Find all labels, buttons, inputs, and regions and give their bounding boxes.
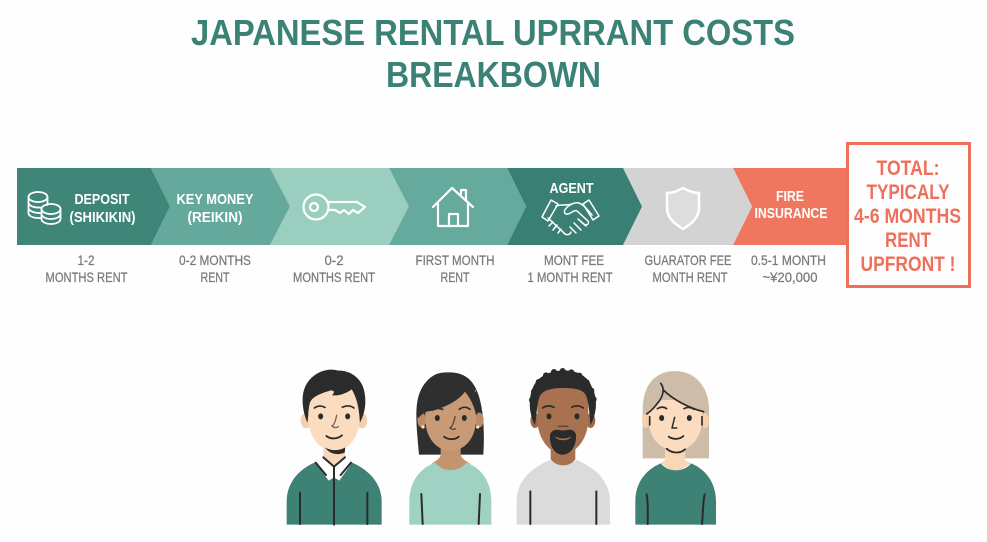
cost detail labels: 0.5-1 MONTH <box>751 252 826 268</box>
step: key money: KEY MONEY <box>176 191 254 208</box>
callout: total upfront: TOTAL: <box>876 157 940 180</box>
cost detail labels: MONTHS RENT <box>293 269 375 285</box>
icon: house <box>433 188 473 226</box>
title: BREAKBOWN <box>386 54 601 95</box>
cost detail labels: 1 MONTH RENT <box>528 269 613 285</box>
icon: shield <box>667 188 699 229</box>
icon: coins <box>28 192 60 224</box>
cost detail labels: RENT <box>440 269 470 285</box>
cost detail labels: 0-2 MONTHS <box>179 252 251 268</box>
title: JAPANESE RENTAL UPRRANT COSTS <box>191 12 795 53</box>
step: deposit: (SHIKIKIN) <box>70 209 136 226</box>
step: deposit: DEPOSIT <box>74 191 130 208</box>
step: deposit <box>17 168 170 245</box>
icon: handshake <box>542 200 599 235</box>
cost detail labels: MONT FEE <box>544 252 604 268</box>
step: guarantor fee <box>623 168 752 245</box>
person: bearded man in grey t-shirt <box>517 368 610 525</box>
step: agent <box>507 168 642 245</box>
callout: total upfront: TYPICALY <box>866 181 950 204</box>
person: blonde woman in green sweater <box>635 371 716 525</box>
cost detail labels: GUARATOR FEE <box>644 252 732 268</box>
title <box>191 12 795 95</box>
step: key icon <box>270 168 409 245</box>
cost detail labels: 0-2 <box>324 252 344 268</box>
cost detail labels: 1-2 <box>78 252 95 268</box>
illustration: four people <box>287 368 716 525</box>
cost detail labels: ~¥20,000 <box>762 269 818 285</box>
cost detail labels: MONTH RENT <box>652 269 728 285</box>
step: key money: (REIKIN) <box>188 209 243 226</box>
cost chevron timeline <box>17 168 850 245</box>
step: key money <box>151 168 290 245</box>
cost detail labels: FIRST MONTH <box>416 252 494 268</box>
curly hair edge <box>529 368 597 411</box>
cost detail labels: MONTHS RENT <box>46 269 128 285</box>
step: fire insurance <box>733 168 850 245</box>
callout: total upfront: UPFRONT ! <box>860 253 956 276</box>
person: woman in mint sweater <box>409 372 491 525</box>
cost detail labels: RENT <box>200 269 230 285</box>
callout: total upfront <box>848 144 970 286</box>
icon: key <box>304 194 365 220</box>
callout: total upfront: RENT <box>885 229 931 252</box>
step: fire insurance: FIRE <box>776 188 804 205</box>
step: agent: AGENT <box>550 180 594 197</box>
callout: total upfront: 4-6 MONTHS <box>854 205 961 228</box>
cost detail labels <box>46 252 826 285</box>
step: fire insurance: INSURANCE <box>754 205 828 222</box>
step: first month rent <box>389 168 526 245</box>
person: man in green cardigan <box>287 370 382 525</box>
